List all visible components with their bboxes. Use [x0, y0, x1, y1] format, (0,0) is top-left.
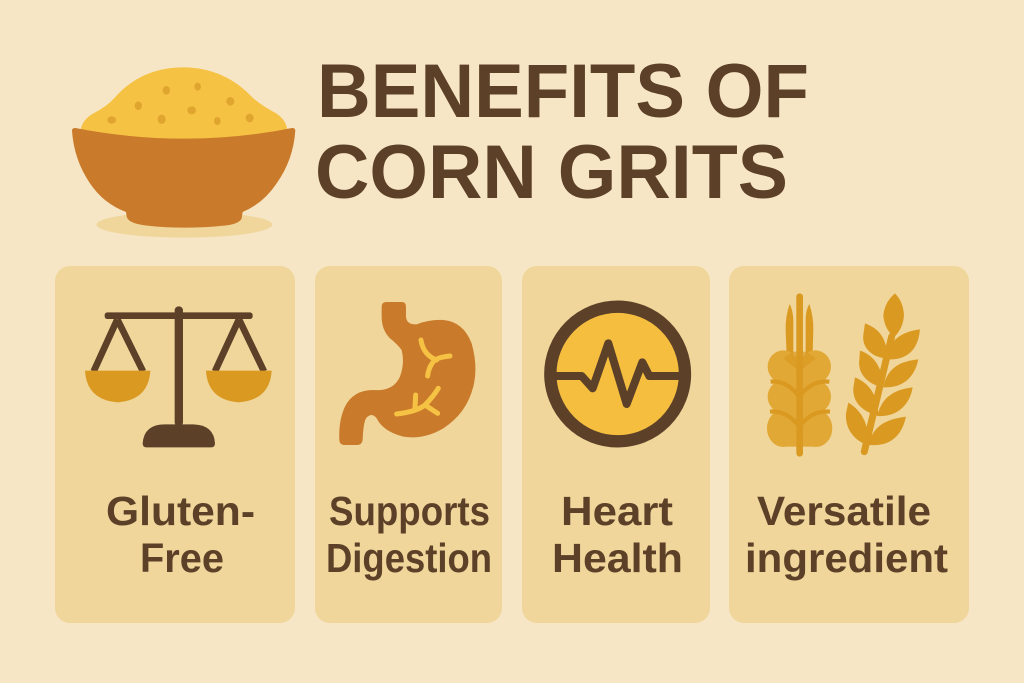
panel background: [55, 266, 295, 623]
panel background: [522, 266, 710, 623]
title: [315, 49, 809, 215]
label: [106, 488, 255, 581]
label: Health: [552, 535, 683, 581]
panel: heart health: [522, 266, 710, 623]
bowl body: [72, 128, 295, 228]
label: [552, 488, 683, 581]
icon: wheat ear: [767, 293, 832, 457]
panel background: [729, 266, 969, 623]
icon: bowl of corn grits: [72, 67, 295, 238]
icon: stomach: [339, 302, 475, 445]
panel background: [315, 266, 502, 623]
label: ingredient: [745, 535, 948, 581]
bowl shadow: [96, 212, 272, 238]
label: Digestion: [326, 535, 492, 581]
icon: heartbeat circle: [550, 307, 685, 441]
panel: supports digestion: [315, 266, 502, 623]
label: [326, 488, 492, 581]
label: Versatile: [757, 488, 931, 534]
mound of grits: [81, 67, 287, 140]
label: Gluten-: [106, 488, 255, 534]
panel: gluten-free: [55, 266, 295, 623]
title: BENEFITS OF: [317, 49, 809, 134]
label: [745, 488, 948, 581]
label: Heart: [561, 488, 673, 534]
label: Free: [140, 535, 224, 581]
label: Supports: [329, 488, 490, 534]
icon: wheat sprig: [846, 293, 920, 452]
icon: balance scale: [85, 306, 272, 447]
title: CORN GRITS: [315, 130, 788, 215]
panel: versatile ingredient: [729, 266, 969, 623]
